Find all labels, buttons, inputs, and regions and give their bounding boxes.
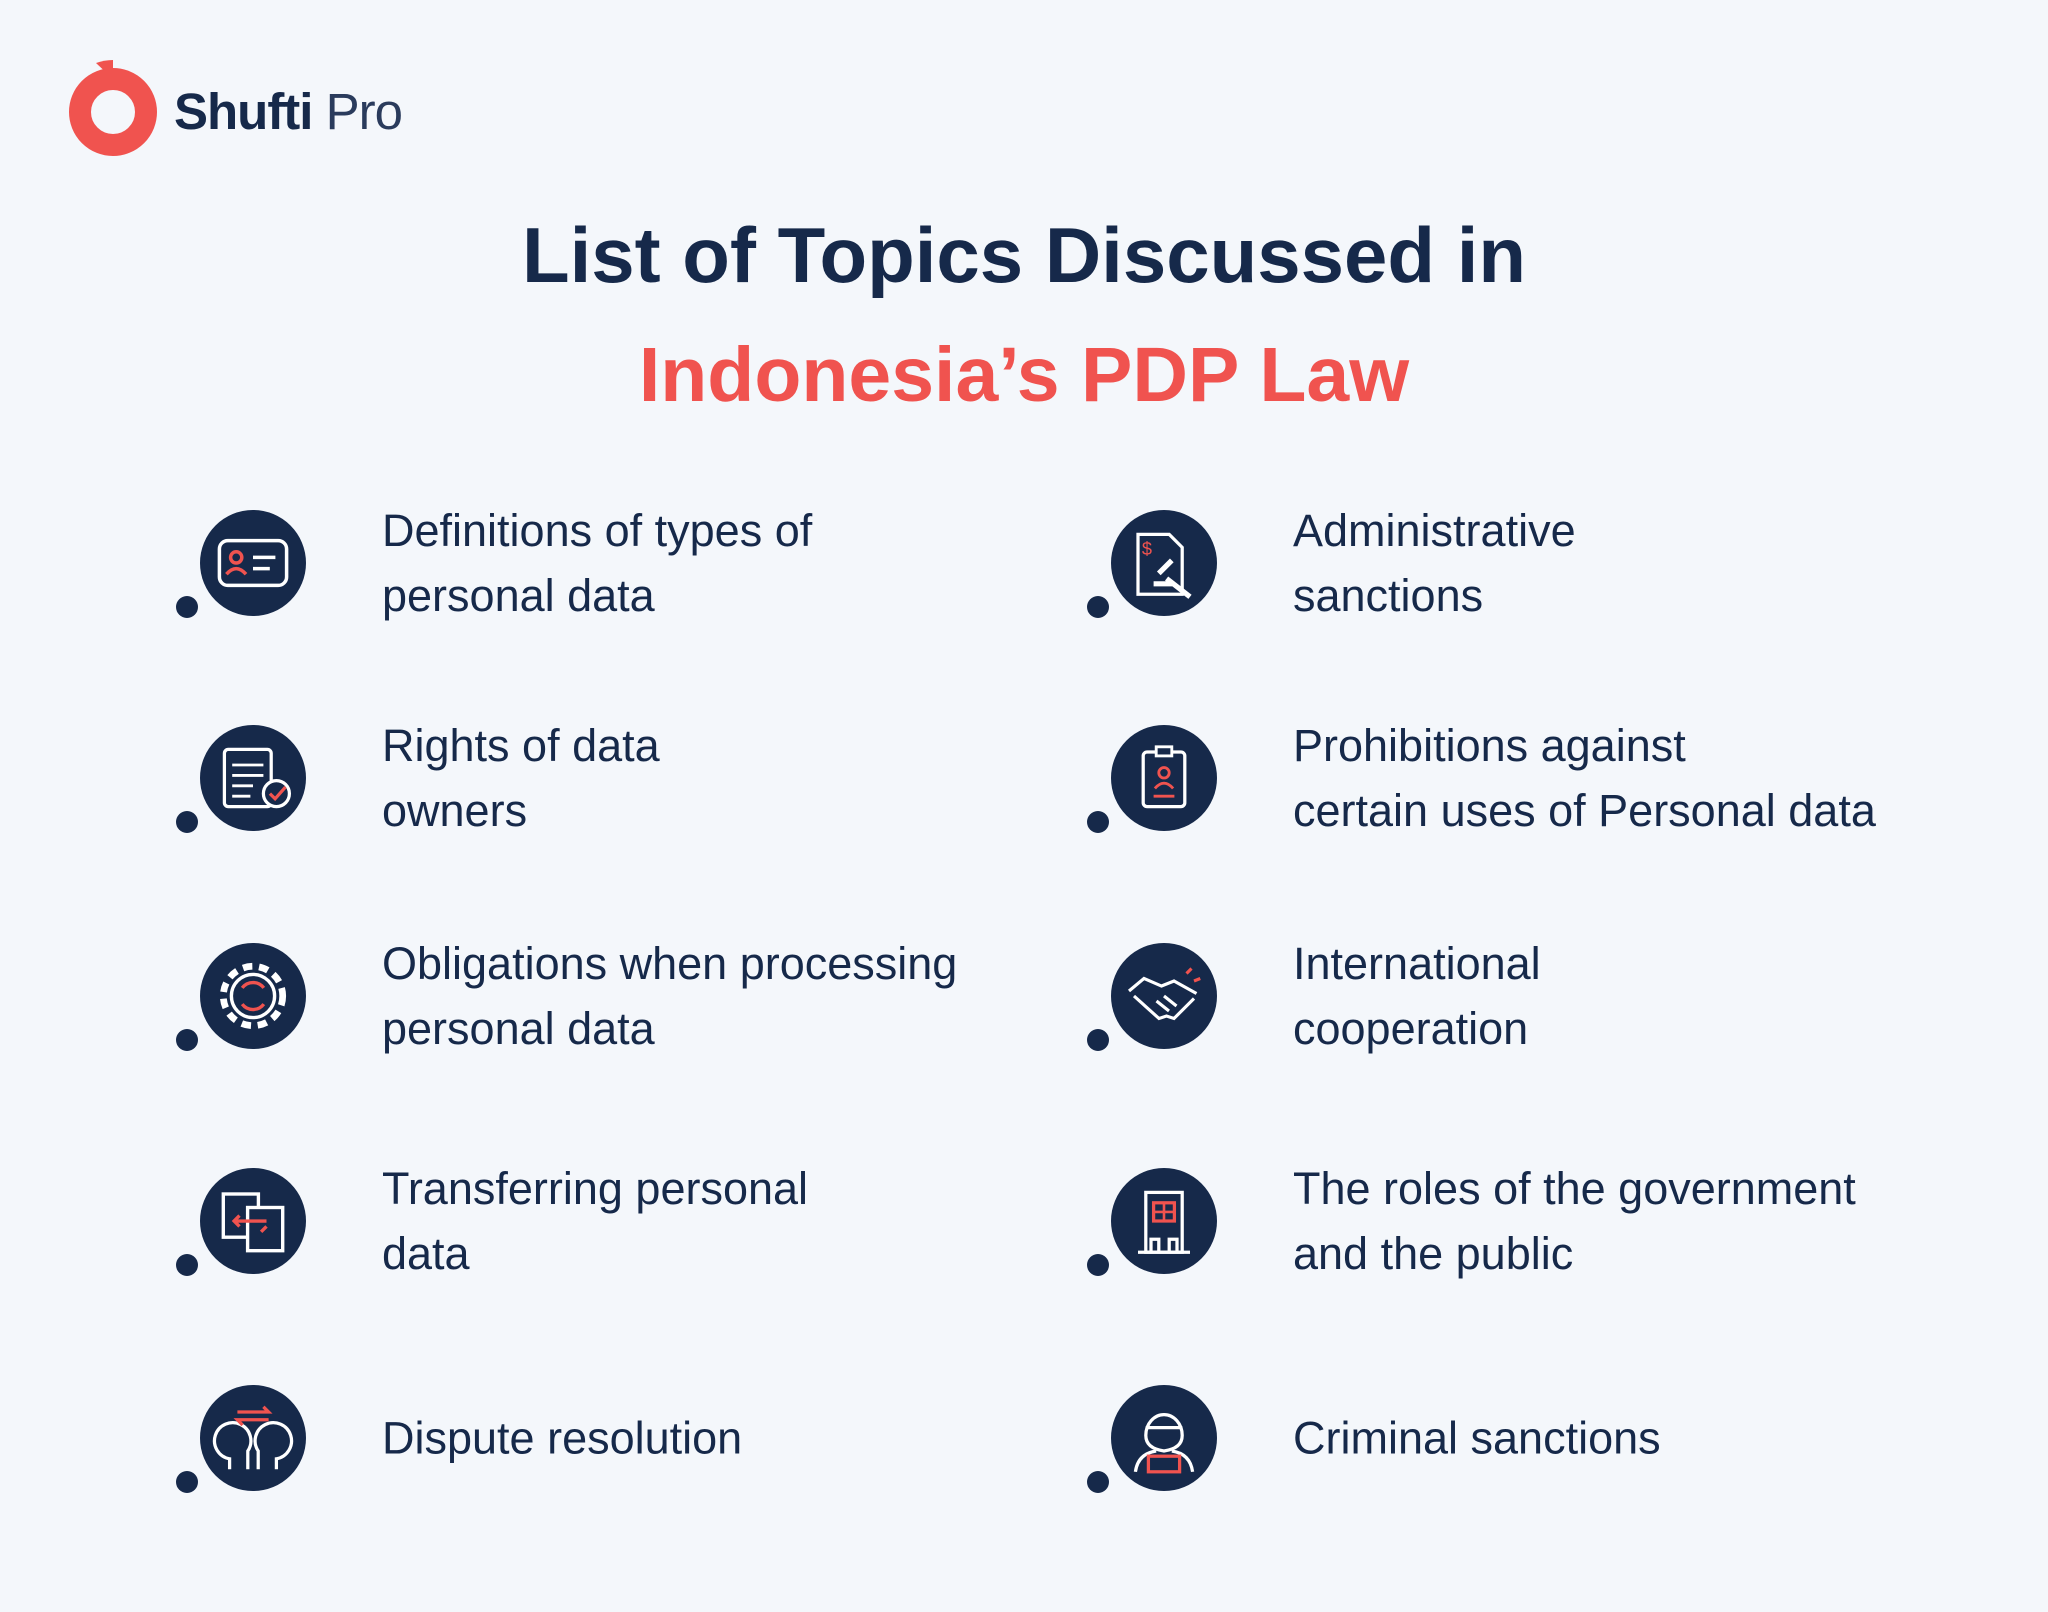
item: obligations: personal data xyxy=(382,1003,655,1054)
item: transferring xyxy=(176,1163,808,1279)
item: definitions: personal data xyxy=(382,570,655,621)
item: criminal xyxy=(1087,1385,1661,1493)
item: rights: owners xyxy=(382,785,527,836)
item: international: cooperation xyxy=(1293,1003,1528,1054)
item: government: and the public xyxy=(1293,1228,1573,1279)
title line 1: List of Topics Discussed in xyxy=(522,211,1526,299)
item: administrative xyxy=(1087,505,1576,621)
item: international xyxy=(1087,938,1541,1054)
item: dispute xyxy=(176,1385,742,1493)
item: transferring: Transferring personal xyxy=(382,1163,808,1214)
logo xyxy=(69,60,402,156)
item: government xyxy=(1087,1163,1856,1279)
item: administrative: sanctions xyxy=(1293,570,1483,621)
item: administrative: Administrative xyxy=(1293,505,1576,556)
item: government: The roles of the government xyxy=(1293,1163,1856,1214)
logo: Shufti Pro xyxy=(174,83,402,140)
item: criminal: Criminal sanctions xyxy=(1293,1412,1661,1464)
item: transferring: data xyxy=(382,1228,470,1279)
title line 2: Indonesia’s PDP Law xyxy=(639,332,1409,418)
item: dispute: Dispute resolution xyxy=(382,1412,742,1464)
item: rights: Rights of data xyxy=(382,720,660,771)
item: administrative: $ xyxy=(1142,539,1152,559)
item: definitions: Definitions of types of xyxy=(382,505,812,556)
item: definitions xyxy=(176,505,812,621)
item: rights xyxy=(176,720,660,836)
item: prohibitions xyxy=(1087,720,1876,836)
item: obligations: Obligations when processing xyxy=(382,938,957,989)
item: obligations xyxy=(176,938,957,1054)
item: prohibitions: Prohibitions against xyxy=(1293,720,1686,771)
item: international: International xyxy=(1293,938,1541,989)
item: prohibitions: certain uses of Personal data xyxy=(1293,785,1876,836)
